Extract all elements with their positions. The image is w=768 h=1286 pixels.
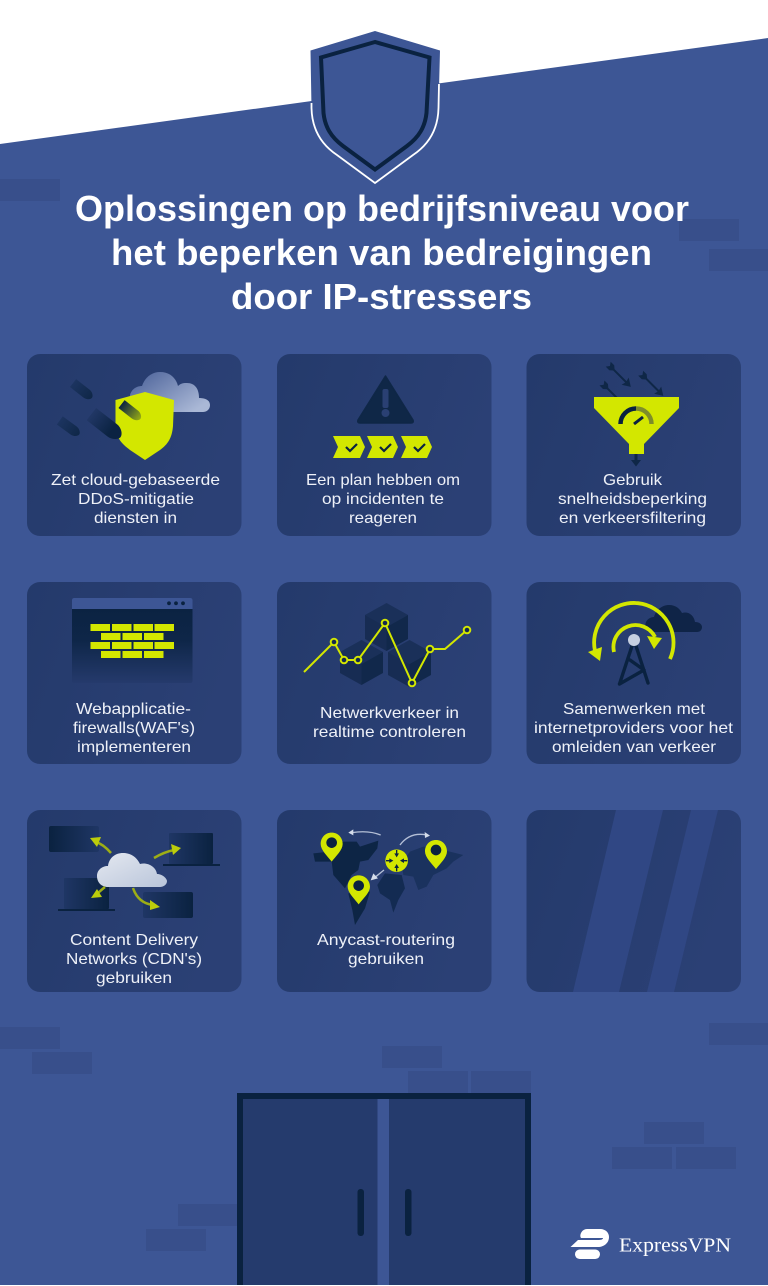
label: internetproviders voor het (534, 720, 734, 737)
label: reageren (349, 510, 417, 527)
label: Content Delivery (70, 932, 198, 949)
label: firewalls(WAF's) (73, 720, 195, 737)
panel: web application firewalls (27, 582, 242, 764)
label (317, 932, 455, 968)
icon: browser window with brick wall (72, 598, 192, 683)
icon: cloud distributing to devices (49, 826, 220, 918)
icon: antenna tower with arcs and cloud (588, 603, 702, 684)
icon: warning triangle and check chevrons (333, 376, 432, 458)
panel: ISP traffic rerouting (526, 582, 741, 764)
label: diensten in (94, 510, 177, 527)
logo: ExpressVPN: ExpressVPN (619, 1234, 731, 1256)
label: Networks (CDN's) (66, 951, 202, 968)
panel: rate limiting and filtering (526, 354, 741, 536)
door (237, 1093, 531, 1285)
label: Netwerkverkeer in (320, 705, 459, 722)
panel: empty window with diagonal glare (526, 810, 741, 992)
label: gebruiken (96, 970, 172, 987)
label (73, 701, 195, 756)
title: het beperken van bedreigingen (111, 232, 652, 273)
panel: content delivery networks (27, 810, 242, 992)
label: Zet cloud-gebaseerde (51, 472, 220, 489)
icon: shield, cloud and missiles (57, 372, 210, 460)
label (51, 472, 220, 527)
panel: incident response plan (277, 354, 492, 536)
label: Webapplicatie- (76, 701, 191, 718)
label: DDoS-mitigatie (78, 491, 194, 508)
label: omleiden van verkeer (552, 739, 717, 756)
label: gebruiken (348, 951, 424, 968)
label: en verkeersfiltering (559, 510, 706, 527)
title (75, 188, 689, 317)
icon: funnel with gauge (594, 361, 679, 466)
label (558, 472, 707, 527)
label: Samenwerken met (563, 701, 706, 718)
label: Een plan hebben om (306, 472, 460, 489)
logo: ExpressVPN (570, 1229, 731, 1259)
panel: realtime network monitoring (277, 582, 492, 764)
label: snelheidsbeperking (558, 491, 707, 508)
label (306, 472, 460, 527)
icon: cubes with line chart (304, 603, 470, 687)
label: Gebruik (603, 472, 663, 489)
label: op incidenten te (322, 491, 444, 508)
label (534, 701, 734, 756)
icon: world map with pins and router (313, 829, 463, 925)
panel: anycast routing (277, 810, 492, 992)
label: implementeren (77, 739, 191, 756)
label: Anycast-routering (317, 932, 455, 949)
title: door IP-stressers (231, 276, 532, 317)
title: Oplossingen op bedrijfsniveau voor (75, 188, 689, 229)
label (66, 932, 202, 987)
label (313, 705, 466, 741)
label: realtime controleren (313, 724, 466, 741)
icon: top shield (310, 31, 440, 183)
panel: cloud DDoS mitigation (27, 354, 242, 536)
